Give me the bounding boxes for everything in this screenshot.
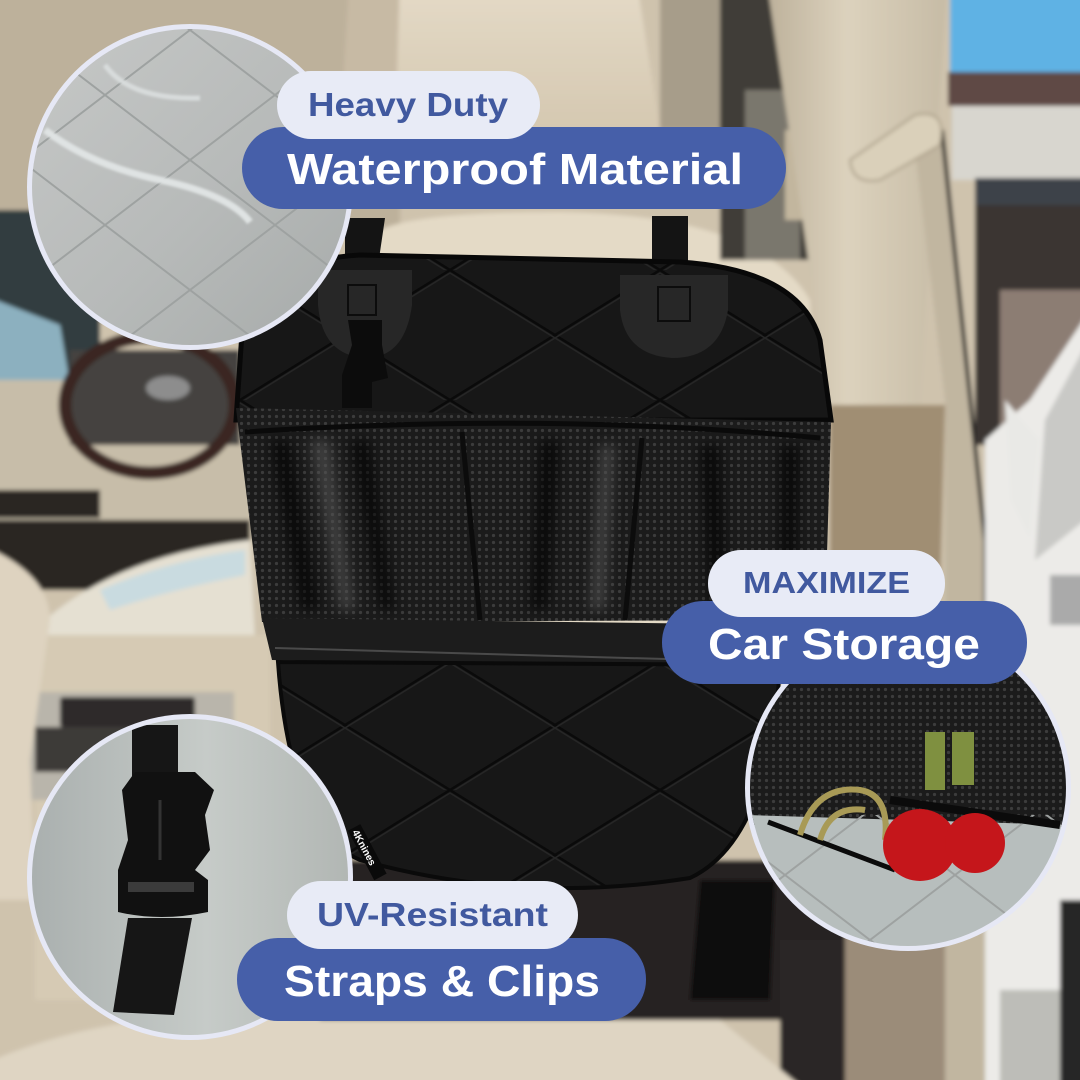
heading: MAXIMIZE: MAXIMIZE (743, 565, 910, 600)
bottom seat (0, 1016, 830, 1080)
mesh pockets (236, 408, 831, 622)
heading: Waterproof Material: Waterproof Material (287, 145, 743, 194)
brand tag: 4Knines (349, 828, 378, 868)
upper quilted panel (236, 255, 831, 420)
label: Waterproof Material (242, 71, 786, 209)
heading: UV-Resistant: UV-Resistant (317, 896, 548, 933)
zipper band (262, 618, 800, 670)
brand tag (348, 824, 387, 880)
pocket binding (245, 423, 820, 438)
lower area (320, 860, 940, 1020)
headrest seat top (395, 0, 660, 130)
seat organizer product (236, 216, 831, 888)
callout circle: car storage (745, 668, 1071, 951)
left rear interior (0, 0, 400, 230)
callout circle: buckle and strap (27, 714, 353, 1040)
straps (345, 218, 385, 320)
console armrest (40, 540, 255, 640)
label: Car Storage (662, 550, 1027, 684)
mesh folds (270, 440, 800, 610)
label: Straps and Clips (237, 881, 646, 1021)
grab handle (850, 114, 942, 181)
leather patches (318, 270, 412, 358)
hook (342, 320, 388, 408)
outside (950, 0, 1080, 72)
rear window gap (720, 0, 810, 260)
lower quilted panel (278, 662, 780, 888)
heading: Car Storage: Car Storage (708, 620, 980, 669)
pillar (765, 0, 948, 405)
callout circle: waterproof material (27, 24, 353, 350)
heading: Heavy Duty: Heavy Duty (308, 86, 509, 123)
heading: Straps & Clips: Straps & Clips (284, 957, 600, 1006)
door (985, 280, 1080, 1080)
